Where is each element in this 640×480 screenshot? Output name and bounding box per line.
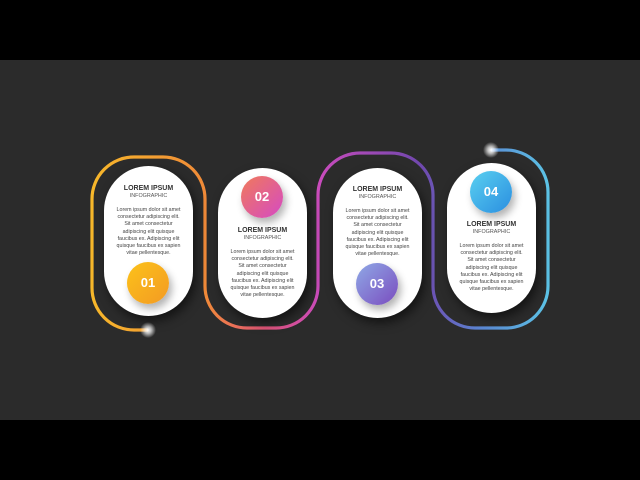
card 2 xyxy=(218,168,307,318)
card 2: LOREM IPSUM xyxy=(238,227,287,234)
card 4: Lorem ipsum dolor sit amet consectetur adipiscing elit. Sit amet consectetur adipiscing elit quisque faucibus ex. Adipiscing elit quisque faucibus ex sapien vitae pellentesque. xyxy=(460,243,523,292)
card 2: INFOGRAPHIC xyxy=(244,235,281,241)
card 3: LOREM IPSUM xyxy=(353,186,402,193)
card 4: LOREM IPSUM xyxy=(467,221,516,228)
card 2: 02 xyxy=(255,189,269,204)
card 1: INFOGRAPHIC xyxy=(130,193,167,199)
card 1: LOREM IPSUM xyxy=(124,185,173,192)
card 1: Lorem ipsum dolor sit amet consectetur adipiscing elit. Sit amet consectetur adipiscing elit quisque faucibus ex. Adipiscing elit quisque faucibus ex sapien vitae pellentesque. xyxy=(117,207,180,256)
card 4: INFOGRAPHIC xyxy=(473,229,510,235)
card 4: 04 xyxy=(484,184,498,199)
card 3: 03 xyxy=(370,276,384,291)
card 3: Lorem ipsum dolor sit amet consectetur adipiscing elit. Sit amet consectetur adipiscing elit quisque faucibus ex. Adipiscing elit quisque faucibus ex sapien vitae pellentesque. xyxy=(346,208,409,257)
card 2: Lorem ipsum dolor sit amet consectetur adipiscing elit. Sit amet consectetur adipiscing elit quisque faucibus ex. Adipiscing elit quisque faucibus ex sapien vitae pellentesque. xyxy=(231,249,294,298)
card 3: INFOGRAPHIC xyxy=(359,194,396,200)
card 4 xyxy=(447,163,536,313)
card 3 xyxy=(333,168,422,318)
card 1: 01 xyxy=(141,275,155,290)
card 1 xyxy=(104,166,193,316)
